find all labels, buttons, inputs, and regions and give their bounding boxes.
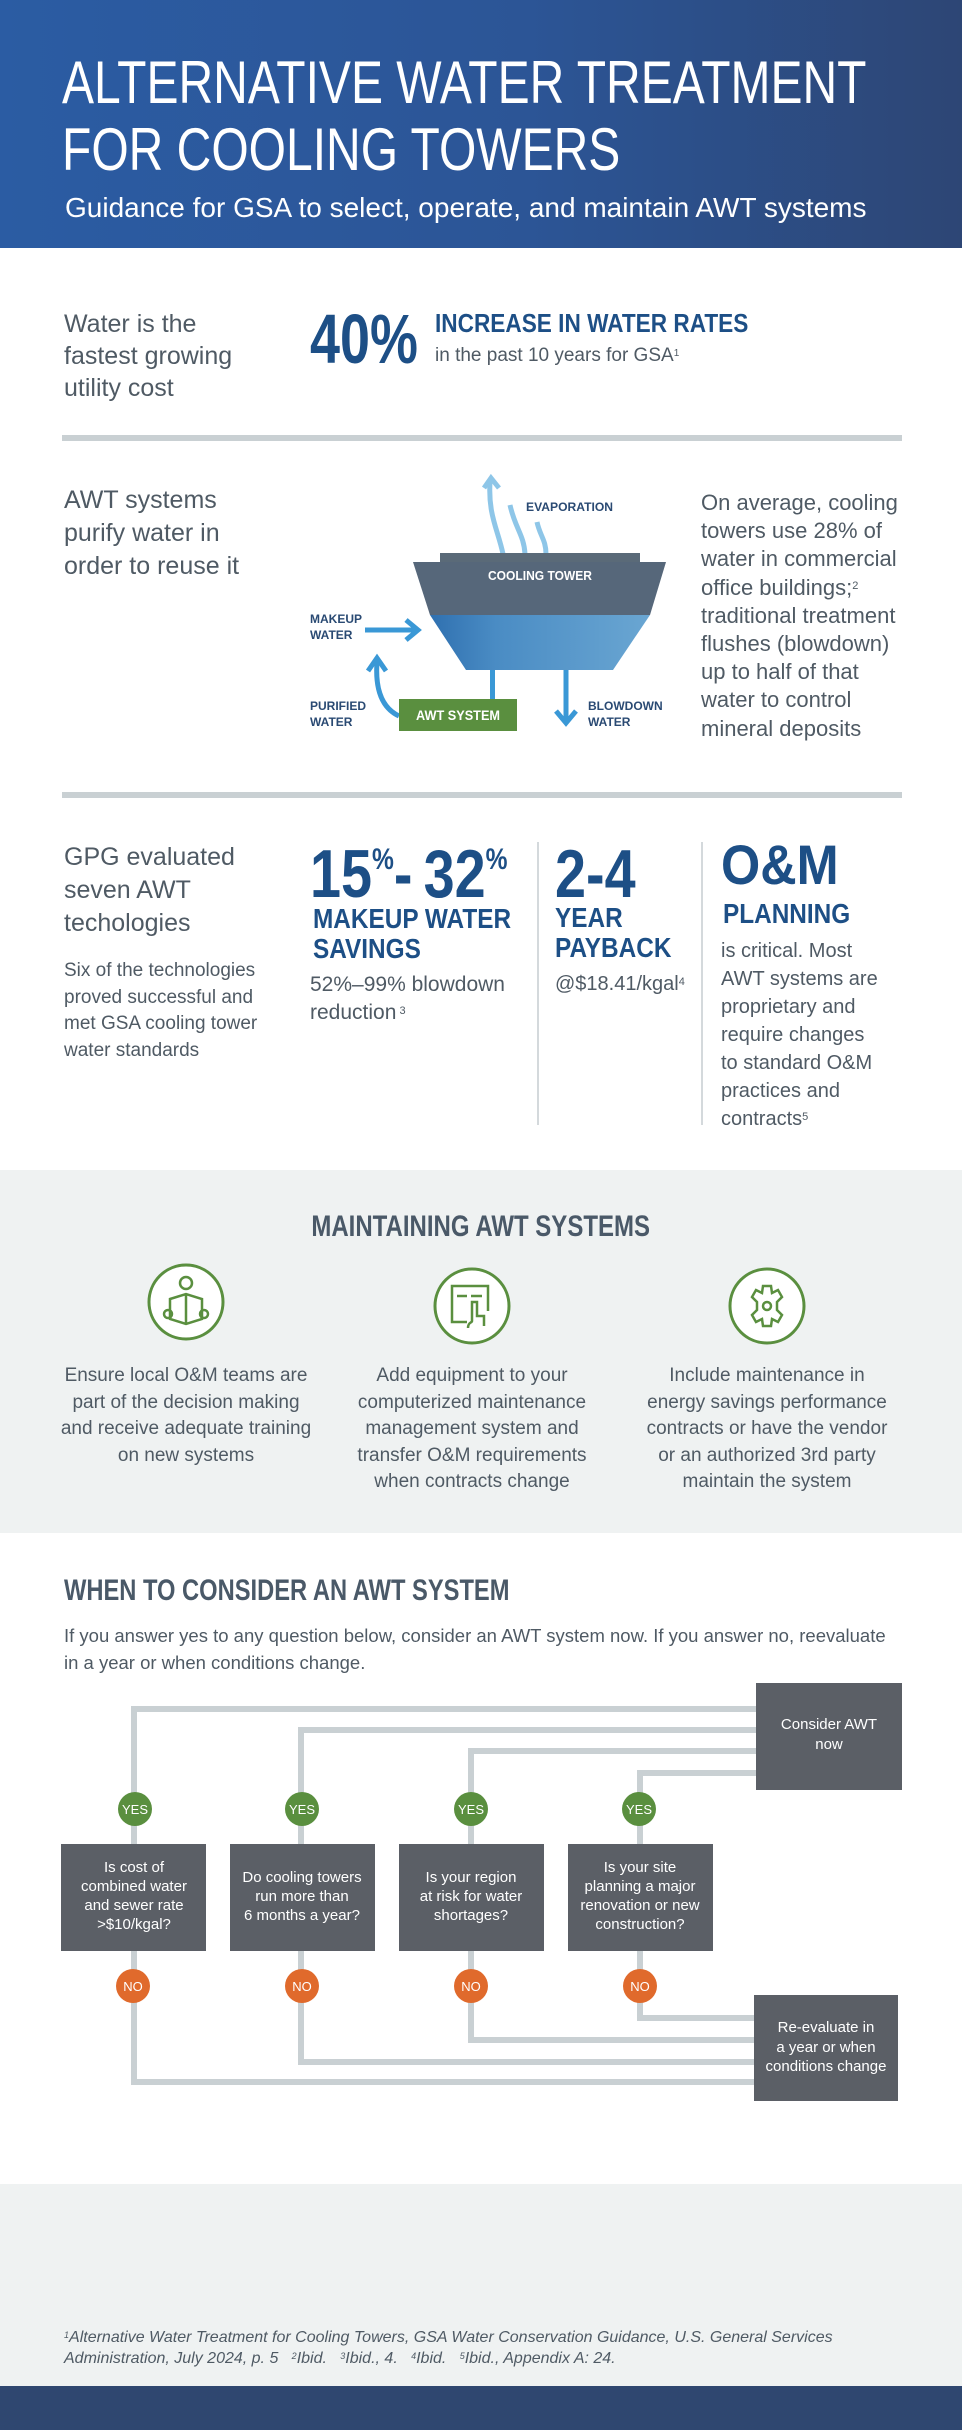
stat: O&M planning: proprietary and — [721, 996, 856, 1018]
text: include maintenance: energy savings performance — [647, 1392, 887, 1412]
text: add equipment: when contracts change — [374, 1471, 570, 1492]
question boxes: shortages? — [434, 1907, 508, 1924]
text: include maintenance: contracts or have the vendor — [647, 1418, 887, 1439]
panel: maintaining AWT systems — [0, 1170, 962, 1533]
footer panel — [0, 2184, 962, 2386]
diagram: cooling tower: WATER — [310, 628, 353, 642]
text: cooling tower usage: On average, cooling — [701, 490, 898, 515]
question boxes: >$10/kgal? — [97, 1916, 171, 1933]
icon: gear — [728, 1268, 806, 1344]
text: add equipment — [357, 1365, 587, 1492]
text: GPG evaluated — [64, 843, 235, 937]
text: include maintenance — [647, 1365, 888, 1492]
yes badges: YES — [122, 1802, 148, 1817]
box: consider AWT now — [756, 1683, 902, 1790]
text: cooling tower usage: flushes (blowdown) — [701, 631, 889, 656]
stat: O&M planning — [721, 833, 878, 1130]
no badges: NO — [123, 1979, 143, 1994]
text: six proved successful: Six of the technologies — [64, 960, 255, 981]
text: water fastest growing — [64, 310, 232, 402]
text: include maintenance: or an authorized 3rd party — [658, 1444, 876, 1466]
stat: 40%: 40% — [310, 300, 418, 378]
text: local teams: on new systems — [118, 1444, 254, 1466]
text: GPG evaluated: seven AWT — [64, 876, 191, 904]
AWT system box — [399, 699, 517, 731]
stat: O&M planning: to standard O&M — [721, 1052, 872, 1074]
text: instructions — [64, 1625, 886, 1673]
stat: payback — [555, 836, 685, 995]
question boxes: Is cost of — [104, 1859, 165, 1876]
footnote: Administration, July 2024, p. 5 2Ibid. 3Ibid., 4. 4Ibid. 5Ibid., Appendix A: 24. — [64, 2350, 616, 2367]
box: consider AWT now: Consider AWT — [781, 1716, 877, 1733]
title: FOR COOLING TOWERS — [62, 116, 620, 183]
question boxes — [61, 1844, 713, 1951]
yes badges: YES — [289, 1802, 315, 1817]
header banner — [0, 0, 962, 248]
box: consider AWT now: now — [815, 1736, 843, 1753]
stat note: in the past 10 years for GSA1 — [435, 345, 679, 366]
text: cooling tower usage: traditional treatment — [701, 603, 895, 628]
box: re-evaluate: a year or when — [776, 2039, 876, 2056]
text: instructions: If you answer yes to any question below, consider an AWT system now. If you answer no, reevaluate — [64, 1625, 886, 1646]
no badges — [116, 1969, 657, 2003]
text: cooling tower usage: office buildings;2 — [701, 575, 858, 600]
title: ALTERNATIVE WATER TREATMENT — [62, 49, 866, 116]
diagram: cooling tower: BLOWDOWN — [588, 699, 663, 713]
question boxes: and sewer rate — [84, 1897, 184, 1914]
question boxes: construction? — [595, 1916, 685, 1933]
text: AWT purify: purify water in — [64, 519, 220, 547]
text: cooling tower usage: mineral deposits — [701, 716, 861, 741]
diagram: cooling tower: EVAPORATION — [526, 500, 613, 514]
no badges: NO — [461, 1979, 481, 1994]
flowchart — [61, 1683, 902, 2101]
heading: when to consider: WHEN TO CONSIDER AN AWT SYSTEM — [64, 1574, 509, 1607]
stat: makeup water savings: reduction 3 — [310, 1001, 406, 1024]
question boxes: run more than — [255, 1888, 349, 1905]
diagram: cooling tower: WATER — [310, 715, 353, 729]
text: local teams: part of the decision making — [72, 1392, 300, 1412]
stat: makeup water savings: SAVINGS — [313, 933, 421, 964]
text: include maintenance: maintain the system — [683, 1471, 851, 1492]
question boxes: 6 months a year? — [244, 1907, 360, 1924]
yes badges: YES — [458, 1802, 484, 1817]
diagram: cooling tower: AWT SYSTEM — [416, 707, 500, 723]
text: six proved successful: water standards — [64, 1040, 199, 1060]
question boxes: combined water — [81, 1878, 187, 1895]
stat: payback: YEAR — [555, 902, 623, 933]
text: add equipment: transfer O&M requirements — [357, 1444, 587, 1466]
evaporation arrows — [484, 478, 546, 554]
stat heading: increase in water rates: INCREASE IN WATER RATES — [435, 308, 748, 338]
text: cooling tower usage: towers use 28% of — [701, 518, 882, 543]
stat: makeup water savings: 52%–99% blowdown — [310, 973, 505, 996]
text: water fastest growing: utility cost — [64, 374, 174, 402]
diagram: cooling tower: WATER — [588, 715, 631, 729]
bottom bar — [0, 2386, 962, 2430]
text: instructions: in a year or when conditions change. — [64, 1652, 365, 1673]
text: GPG evaluated: GPG evaluated — [64, 843, 235, 871]
stat: O&M planning: practices and — [721, 1080, 840, 1102]
text: GPG evaluated: techologies — [64, 909, 190, 937]
question boxes: Is your site — [604, 1859, 676, 1876]
question boxes: renovation or new — [580, 1897, 700, 1914]
text: cooling tower usage — [701, 490, 898, 741]
stat: O&M planning: require changes — [721, 1024, 864, 1046]
text: local teams: Ensure local O&M teams are — [65, 1365, 307, 1386]
stat: payback: @$18.41/kgal4 — [555, 973, 685, 995]
question boxes: Do cooling towers — [242, 1869, 362, 1886]
text: add equipment: computerized maintenance — [358, 1392, 586, 1412]
title — [62, 49, 866, 183]
question boxes: planning a major — [585, 1878, 695, 1895]
diagram: cooling tower: PURIFIED — [310, 699, 366, 713]
yes badges: YES — [626, 1802, 652, 1817]
text: local teams — [61, 1365, 311, 1466]
stat: O&M planning: PLANNING — [723, 898, 850, 929]
text: add equipment: management system and — [365, 1418, 579, 1439]
text: water fastest growing: fastest growing — [64, 342, 232, 370]
pipes — [490, 670, 495, 700]
text: cooling tower usage: water in commercial — [701, 546, 897, 571]
text: AWT purify — [64, 486, 239, 580]
text: include maintenance: Include maintenance in — [669, 1365, 865, 1386]
stat: makeup water savings: MAKEUP WATER — [313, 903, 511, 934]
icon: reader — [148, 1264, 224, 1340]
box: re-evaluate: Re-evaluate in — [778, 2019, 874, 2036]
text: six proved successful: met GSA cooling tower — [64, 1013, 257, 1034]
stat: O&M planning: is critical. Most — [721, 940, 852, 962]
footnote — [63, 2329, 833, 2367]
makeup water: MAKEUP — [310, 612, 362, 626]
question boxes: at risk for water — [420, 1888, 522, 1905]
text: six proved successful: proved successful and — [64, 986, 253, 1008]
stat: O&M planning: AWT systems are — [721, 968, 878, 990]
no badges: NO — [292, 1979, 312, 1994]
box: re-evaluate: conditions change — [766, 2058, 886, 2075]
stat: payback: 2-4 — [555, 836, 636, 912]
text: cooling tower usage: up to half of that — [701, 659, 859, 684]
yes badges — [118, 1792, 656, 1826]
text: cooling tower usage: water to control — [701, 687, 851, 712]
text: AWT purify: order to reuse it — [64, 552, 239, 580]
diagram: cooling tower — [310, 474, 666, 731]
stat: O&M planning: O&M — [721, 833, 839, 896]
stat: makeup water savings — [310, 836, 511, 1024]
subtitle: Guidance for GSA to select, operate, and maintain AWT systems — [65, 192, 866, 223]
text: local teams: and receive adequate training — [61, 1418, 311, 1439]
question boxes: Is your region — [426, 1869, 516, 1886]
stat: payback: PAYBACK — [555, 932, 671, 963]
text: six proved successful — [64, 960, 257, 1060]
diagram: cooling tower: COOLING TOWER — [488, 568, 593, 583]
box: re-evaluate — [754, 1995, 898, 2101]
stat: makeup water savings: 15%- 32% — [310, 836, 508, 912]
heading: MAINTAINING AWT SYSTEMS — [312, 1210, 650, 1243]
text: AWT purify: AWT systems — [64, 486, 217, 514]
stat: O&M planning: contracts5 — [721, 1108, 808, 1130]
icon: computer touch — [434, 1268, 510, 1344]
text: water fastest growing: Water is the — [64, 310, 196, 338]
text: add equipment: Add equipment to your — [376, 1365, 568, 1386]
no badges: NO — [630, 1979, 650, 1994]
footnote: 1Alternative Water Treatment for Cooling Towers, GSA Water Conservation Guidance, U.S. General Services — [64, 2329, 833, 2346]
